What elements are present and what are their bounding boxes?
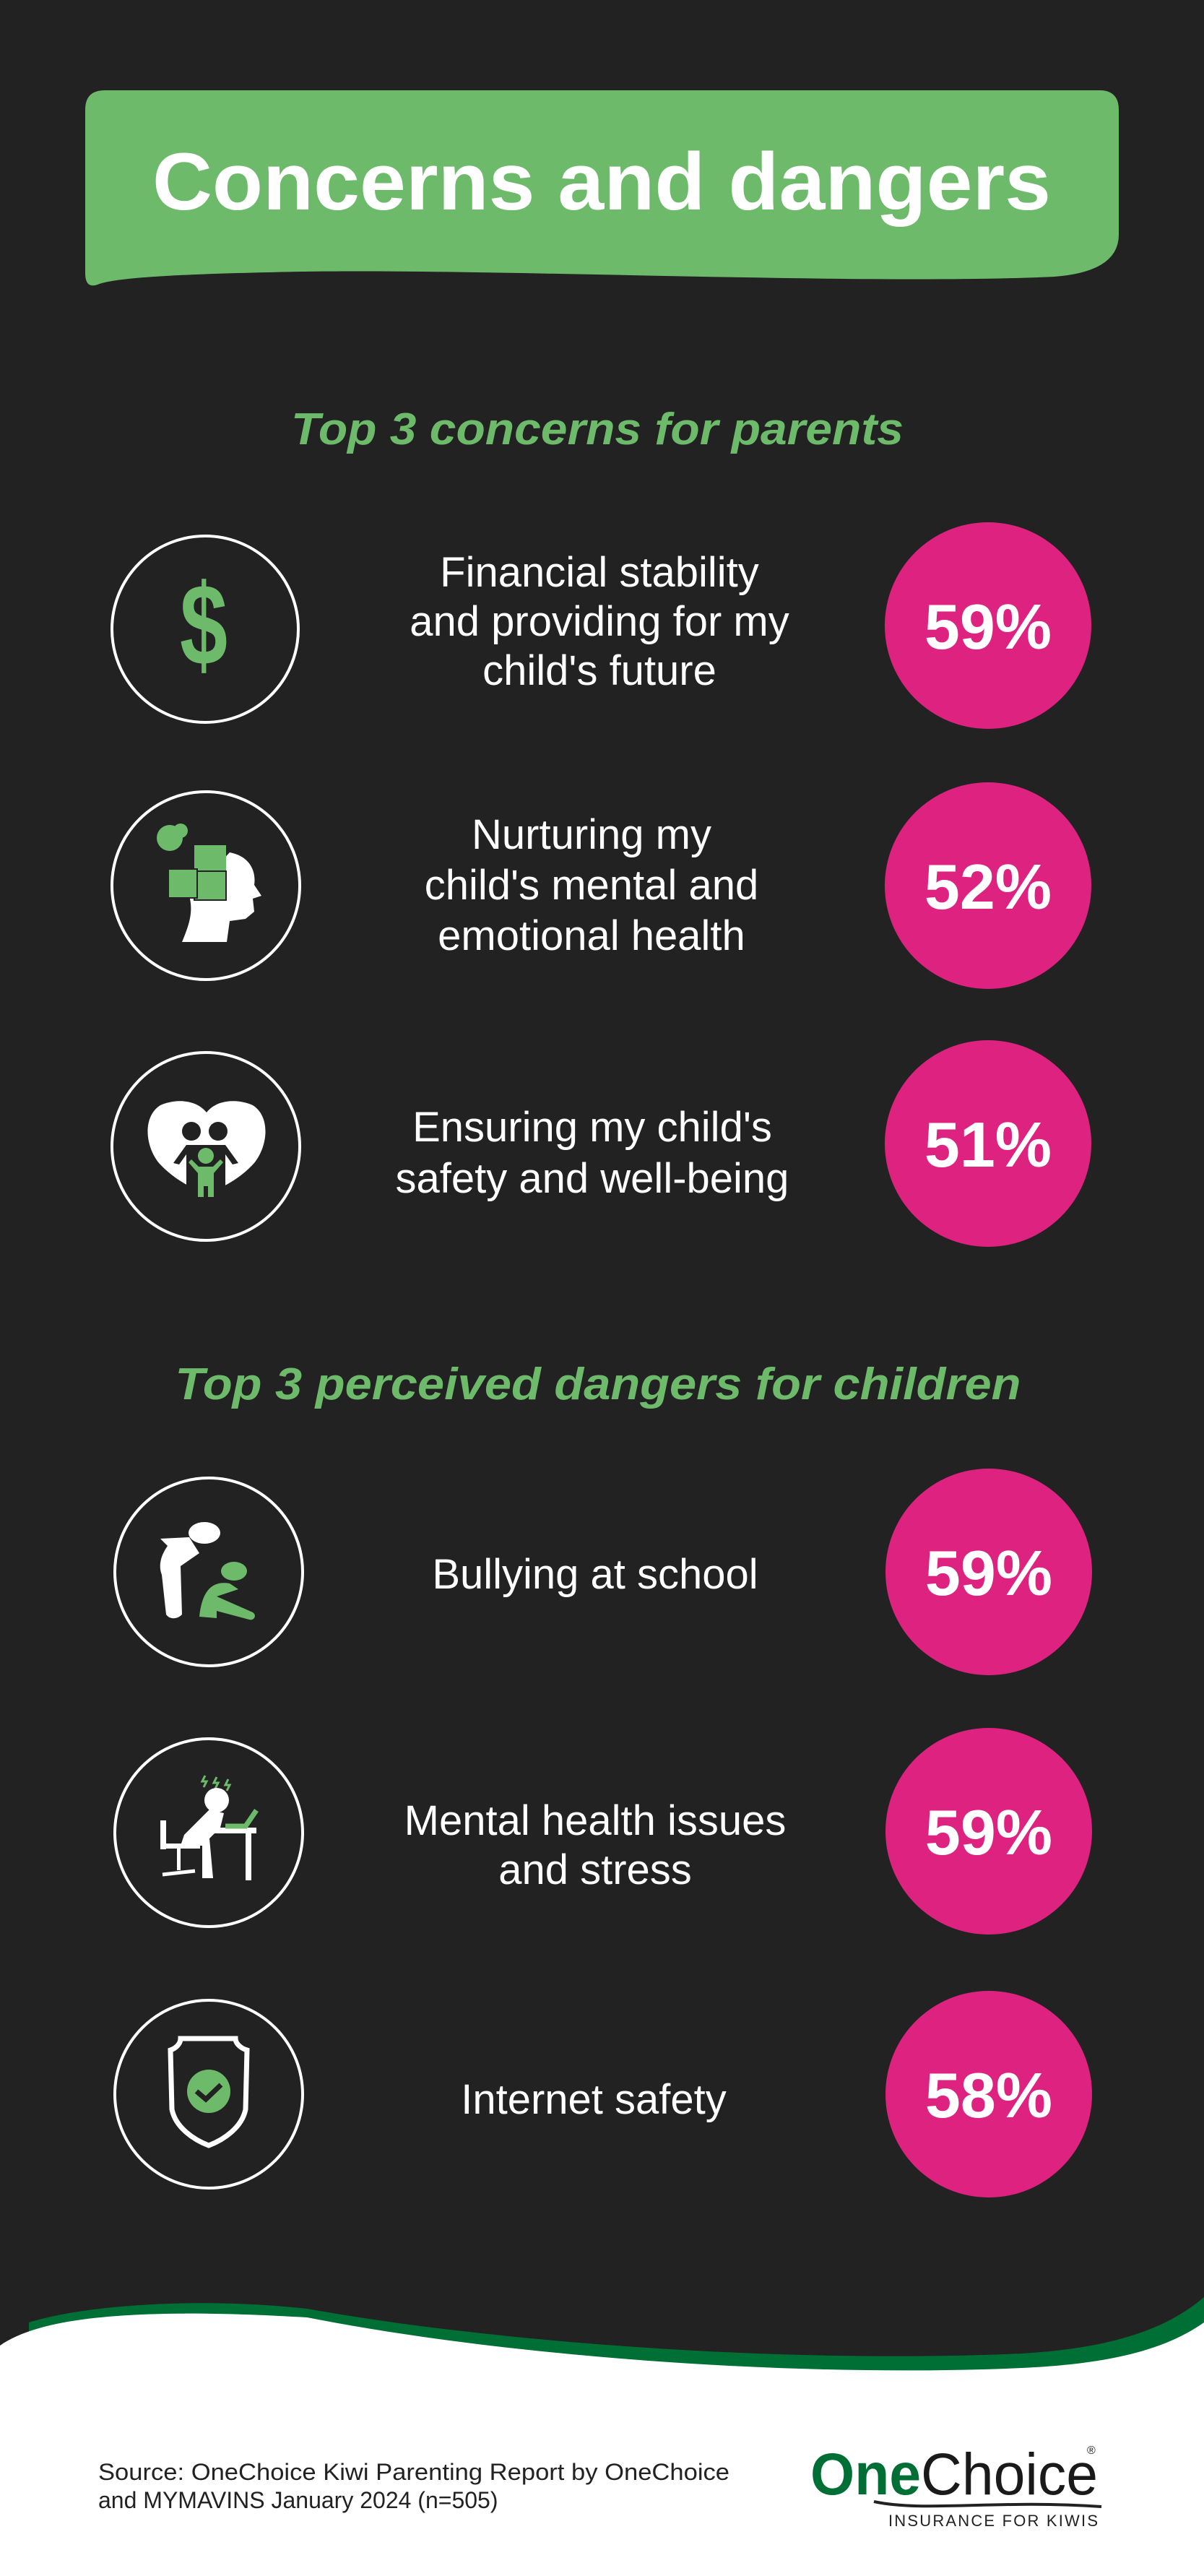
source text: Source: OneChoice Kiwi Parenting Report by OneChoice [98,2459,729,2485]
title: Concerns and dangers [152,137,1051,227]
icon: stressed at desk [115,1739,303,1927]
icon: bullying [115,1478,303,1666]
text: financial stability: child's future [482,647,716,694]
text: mental health issues: Mental health issues [404,1797,786,1844]
icon: head with puzzle [112,792,300,980]
badge: 52% [885,782,1091,989]
row 5: mental health [115,1728,1092,1935]
text: financial stability: Financial stability [440,549,759,596]
row 6: internet safety [115,1991,1092,2197]
logo: OneChoice: OneChoice [810,2442,1098,2507]
badge: 59% [885,1728,1092,1935]
badge: 59% [885,522,1091,729]
title banner [85,90,1119,285]
source text: and MYMAVINS January 2024 (n=505) [98,2487,498,2513]
row 2: mental [112,782,1091,989]
badge: 59% [885,1469,1092,1675]
badge: 58%: 58% [925,2059,1052,2131]
icon: dollar [112,536,298,722]
badge: 52%: 52% [924,851,1052,922]
icon: heart family [112,1053,300,1240]
badge: 51% [885,1040,1091,1247]
badge: 51%: 51% [924,1109,1052,1180]
text: ensuring safety: safety and well-being [396,1155,789,1202]
text: bullying: Bullying at school [432,1551,758,1598]
heading: top 3 dangers: Top 3 perceived dangers for children [175,1360,1021,1409]
text: nurturing: Nurturing my [472,811,711,858]
badge: 59%: 59% [924,591,1052,662]
text: nurturing: emotional health [438,912,745,959]
logo: OneChoice: INSURANCE FOR KIWIS [888,2512,1098,2530]
text: nurturing: child's mental and [425,862,758,909]
icon: shield check [115,2000,303,2188]
footer wave [0,2297,1204,2576]
badge: 59%: 59% [925,1797,1052,1868]
heading: top 3 concerns: Top 3 concerns for parents [291,405,904,454]
row 3: safety [112,1040,1091,1247]
badge: 59%: 59% [925,1537,1052,1609]
text: internet safety: Internet safety [461,2076,727,2123]
badge: 58% [885,1991,1092,2197]
icon: dollar: $ [180,560,228,689]
row 4: bullying [115,1469,1092,1675]
logo: OneChoice: ® [1087,2445,1096,2457]
text: ensuring safety: Ensuring my child's [412,1104,772,1151]
row 1: financial [112,522,1091,729]
text: financial stability: and providing for my [410,598,789,645]
text: mental health issues: and stress [498,1846,692,1893]
